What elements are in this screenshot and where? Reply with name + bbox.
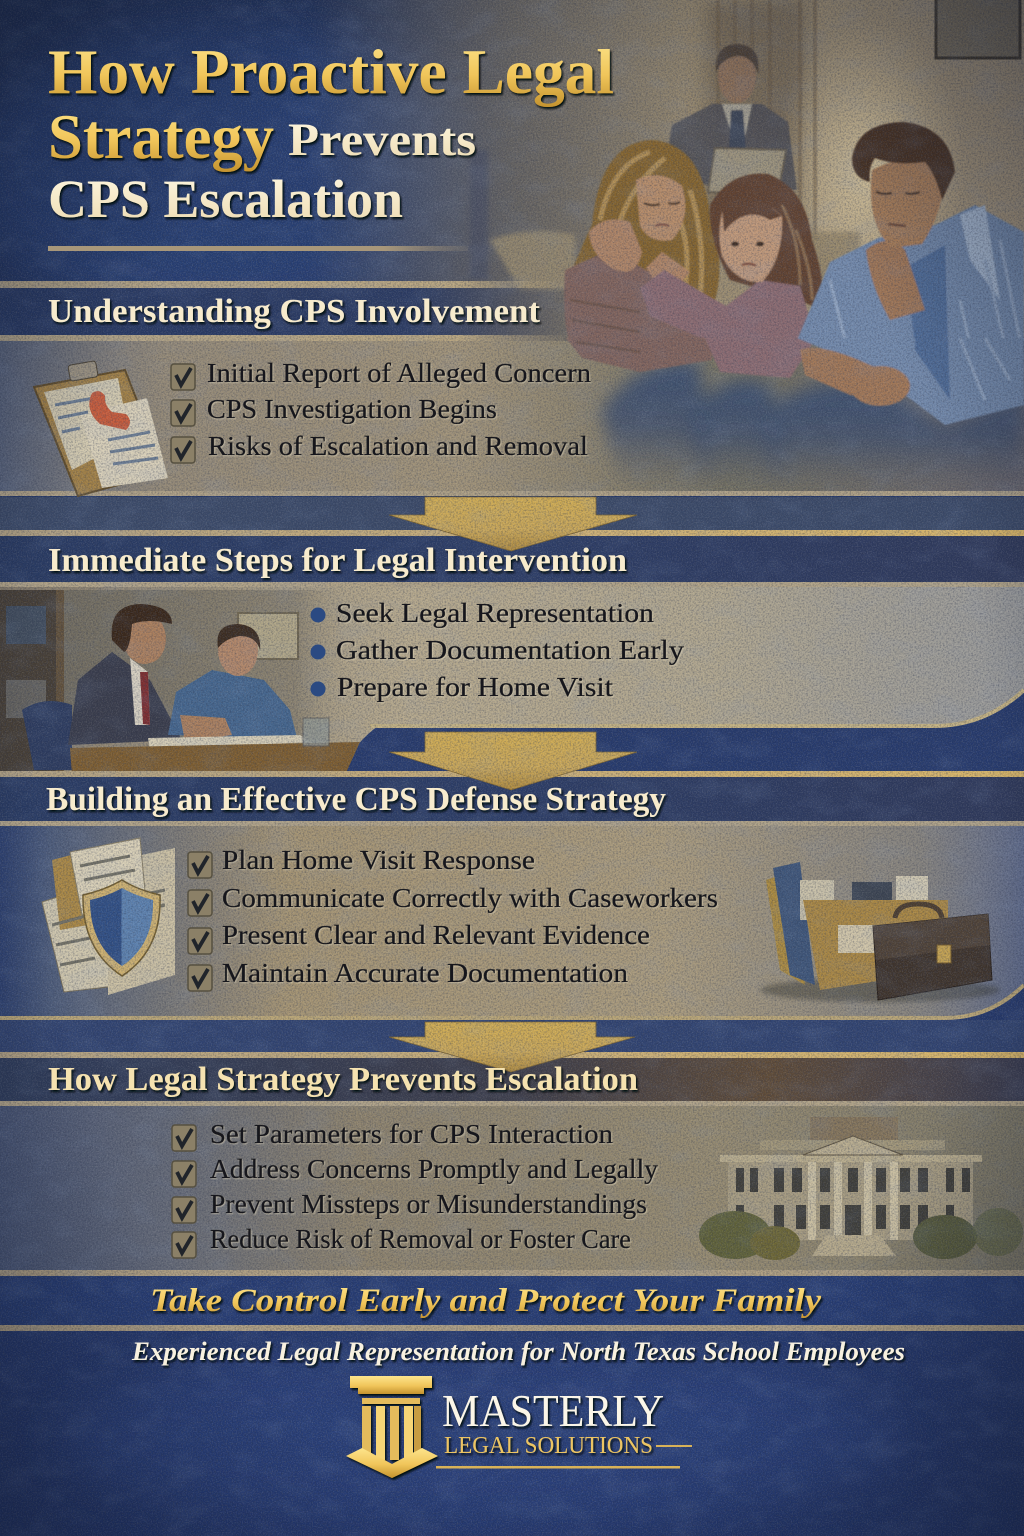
couch and furniture	[470, 150, 860, 290]
checklist: section 1	[171, 358, 592, 463]
illustration: courthouse	[699, 1117, 1023, 1260]
checklist: section 4: Prevent Missteps or Misunderstandings	[210, 1189, 647, 1219]
title: Prevents	[288, 114, 476, 166]
arrow 2	[389, 732, 637, 790]
checklist: section 3: Plan Home Visit Response	[222, 845, 535, 875]
checklist: section 4: Set Parameters for CPS Interaction	[210, 1119, 614, 1149]
checklist: section 3: Communicate Correctly with Caseworkers	[222, 883, 718, 913]
call to action band	[0, 1270, 1024, 1331]
checklist: section 4	[172, 1119, 658, 1258]
heading: section 2: Immediate Steps for Legal Intervention	[48, 542, 627, 579]
icon: shield and papers	[42, 838, 175, 995]
checklist: section 1: CPS Investigation Begins	[207, 394, 497, 424]
child	[640, 174, 823, 345]
section 4 header band	[0, 1052, 1024, 1106]
bullet list: section 2: Gather Documentation Early	[336, 635, 685, 665]
father	[795, 122, 1024, 345]
mother	[564, 140, 720, 345]
section 2 panel	[0, 587, 1024, 775]
title: How Proactive Legal	[48, 36, 614, 107]
logo: Masterly Legal Solutions: LEGAL SOLUTIONS	[444, 1433, 653, 1459]
hero scene	[0, 0, 1024, 345]
illustration: lawyer and client	[0, 590, 360, 775]
checklist: section 3: Present Clear and Relevant Evidence	[222, 920, 650, 950]
title divider	[48, 246, 468, 251]
section 3 panel	[0, 826, 1024, 1018]
heading: section 4: How Legal Strategy Prevents Escalation	[48, 1061, 638, 1098]
icon: pillar	[346, 1376, 438, 1478]
heading: section 3: Building an Effective CPS Defense Strategy	[46, 781, 666, 818]
standing man with tablet	[662, 44, 797, 194]
arrow 3	[389, 1022, 635, 1072]
family figures lower overlap	[566, 338, 1024, 425]
family jeans	[600, 361, 1024, 490]
section 1 panel	[0, 338, 1024, 496]
bullet list: section 2: Prepare for Home Visit	[337, 672, 614, 702]
title: CPS Escalation	[48, 169, 403, 229]
tagline: Experienced Legal Representation for North Texas School Employees	[131, 1337, 905, 1366]
section 1 header band	[0, 281, 575, 341]
checklist: section 4: Reduce Risk of Removal or Foster Care	[210, 1224, 631, 1254]
call to action text: Take Control Early and Protect Your Family	[150, 1283, 821, 1319]
title	[48, 36, 614, 229]
picture frame	[936, 0, 1020, 58]
section 3 header band	[0, 771, 1024, 826]
title: Strategy	[48, 101, 274, 172]
checklist: section 1: Risks of Escalation and Removal	[208, 431, 588, 461]
icon: clipboard with phone	[34, 361, 168, 496]
logo: Masterly Legal Solutions: MASTERLY	[442, 1385, 664, 1436]
illustration: folders and briefcase	[760, 862, 1000, 1002]
checklist: section 4: Address Concerns Promptly and Legally	[210, 1154, 658, 1184]
logo: Masterly Legal Solutions	[346, 1376, 692, 1478]
bullet list: section 2: Seek Legal Representation	[336, 598, 655, 628]
section 2 header band	[0, 530, 1024, 587]
heading: section 1: Understanding CPS Involvement	[48, 293, 541, 330]
section 4 panel	[0, 1106, 1024, 1270]
checklist: section 3	[188, 845, 718, 991]
checklist: section 3: Maintain Accurate Documentation	[222, 958, 629, 988]
arrow 1	[389, 497, 637, 551]
bullet list: section 2	[310, 598, 685, 702]
checklist: section 1: Initial Report of Alleged Concern	[207, 358, 592, 388]
